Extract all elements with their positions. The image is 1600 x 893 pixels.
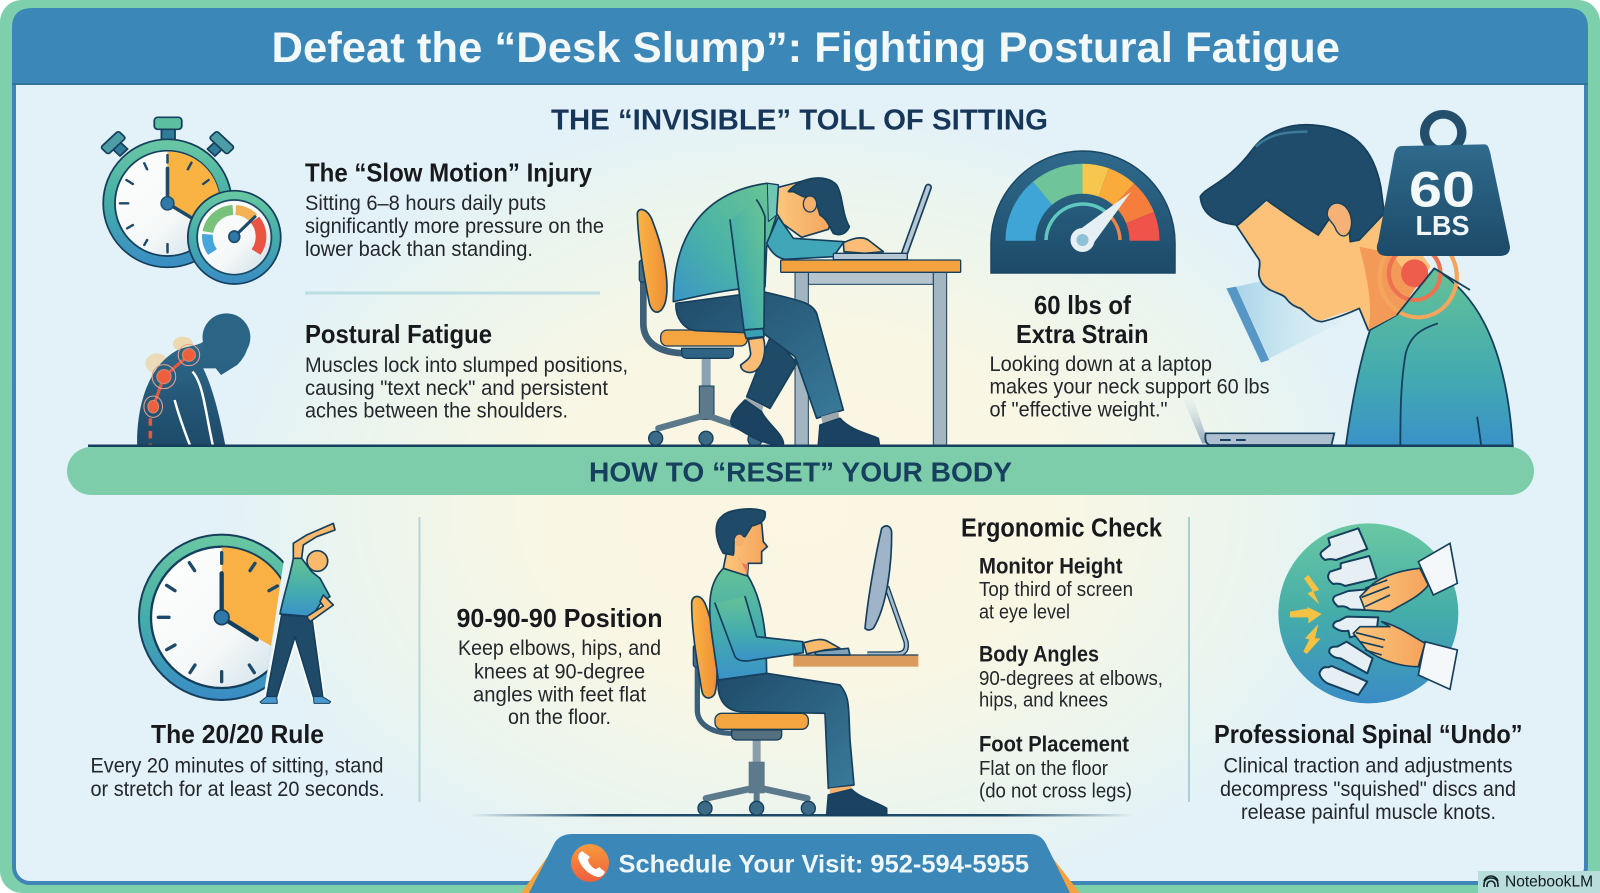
illustration: upright man at monitor	[692, 509, 918, 815]
icon: strain gauge	[991, 151, 1175, 273]
text: postural fatigue body: aches between the shoulders.	[305, 398, 568, 422]
text: 60 lbs body: makes your neck support 60 lbs	[990, 374, 1270, 398]
icon: phone	[571, 844, 609, 882]
block: ergonomic check	[961, 514, 1163, 802]
text: 60 lbs body: of "effective weight."	[990, 398, 1168, 422]
text: slow motion injury body	[305, 191, 604, 261]
upper hand	[1360, 543, 1457, 612]
laptop	[1181, 393, 1334, 445]
heading: slow motion injury: The “Slow Motion” Injury	[305, 158, 592, 188]
item: foot placement: Foot Placement	[979, 732, 1130, 756]
text: 90-90-90 body: Keep elbows, hips, and	[458, 636, 661, 660]
heading: reset: HOW TO “RESET” YOUR BODY	[589, 456, 1012, 488]
heading: professional spinal undo: Professional Spinal “Undo”	[1214, 719, 1522, 749]
chair	[692, 596, 815, 815]
title: Defeat the “Desk Slump”: Fighting Postural Fatigue	[272, 24, 1340, 72]
item: monitor height: Top third of screen	[979, 578, 1133, 601]
heading: 90-90-90 position: 90-90-90 Position	[456, 603, 662, 633]
text: postural fatigue body: Muscles lock into slumped positions,	[305, 353, 628, 377]
text: spinal undo body: Clinical traction and adjustments	[1224, 754, 1512, 778]
text: spinal undo body: release painful muscle knots.	[1241, 800, 1496, 824]
text: 20/20 rule body: Every 20 minutes of sitting, stand	[90, 754, 384, 778]
heading: 60 lbs of extra strain	[1016, 290, 1148, 349]
item: monitor height: Monitor Height	[979, 554, 1123, 578]
pain rings	[1380, 236, 1457, 317]
lower hand	[1353, 622, 1457, 689]
stretching person	[260, 523, 335, 703]
icon: slumped back with pain points	[137, 313, 250, 445]
band: how to reset your body	[67, 447, 1534, 495]
text: 60 lbs body	[990, 352, 1270, 422]
heading: postural fatigue: Postural Fatigue	[305, 319, 492, 349]
section: how to reset	[90, 509, 1522, 824]
NotebookLM badge	[1478, 871, 1600, 893]
text: spinal undo body	[1220, 754, 1516, 824]
item: monitor height	[979, 554, 1133, 624]
desk and monitor	[793, 526, 918, 667]
icon: 60 lbs weight: 60	[1409, 162, 1475, 218]
heading: 60 lbs of extra strain: Extra Strain	[1016, 319, 1148, 349]
text: 90-90-90 body: angles with feet flat	[473, 682, 646, 706]
title banner	[12, 8, 1588, 85]
chair	[637, 210, 762, 446]
text: 20/20 rule body: or stretch for at least 20 seconds.	[90, 777, 384, 801]
illustration: man looking down with 60 lb weight	[1181, 114, 1513, 447]
icon: spine adjustment	[1278, 523, 1458, 703]
impact arrow and bolts	[1290, 575, 1322, 654]
item: monitor height: at eye level	[979, 600, 1070, 624]
text: 90-90-90 body	[458, 636, 661, 729]
item: body angles: hips, and knees	[979, 688, 1108, 712]
desk	[795, 272, 947, 446]
icon: 60 lbs weight: LBS	[1416, 210, 1470, 241]
item: body angles	[979, 642, 1163, 712]
icon: stopwatch with mini gauge	[101, 117, 281, 284]
text: slow motion injury body: Sitting 6–8 hours daily puts	[305, 191, 546, 215]
heading: invisible toll: THE “INVISIBLE” TOLL OF SITTING	[551, 104, 1048, 136]
section: the invisible toll of sitting	[101, 104, 1513, 447]
heading: 20/20 rule: The 20/20 Rule	[151, 719, 324, 749]
item: body angles: 90-degrees at elbows,	[979, 667, 1163, 690]
item: foot placement: (do not cross legs)	[979, 780, 1132, 802]
text: postural fatigue body	[305, 353, 628, 422]
text: 60 lbs body: Looking down at a laptop	[990, 352, 1212, 376]
item: body angles: Body Angles	[979, 642, 1099, 666]
heading: ergonomic check: Ergonomic Check	[961, 514, 1163, 542]
vertebrae	[1319, 528, 1378, 695]
NotebookLM badge: NotebookLM	[1505, 874, 1593, 890]
text: slow motion injury body: lower back than standing.	[305, 237, 533, 261]
item: foot placement	[979, 732, 1132, 802]
illustration: slumped man at desk	[637, 178, 961, 446]
phone number text: Schedule Your Visit: 952-594-5955	[618, 850, 1029, 878]
text: postural fatigue body: causing "text neck" and persistent	[305, 376, 608, 400]
text: 90-90-90 body: on the floor.	[508, 705, 611, 729]
screen glow	[1226, 282, 1359, 363]
heading: 60 lbs of extra strain: 60 lbs of	[1034, 290, 1131, 320]
icon: 60 lbs weight	[1377, 114, 1510, 256]
text: 90-90-90 body: knees at 90-degree	[474, 660, 645, 684]
text: slow motion injury body: significantly more pressure on the	[305, 214, 604, 238]
item: foot placement: Flat on the floor	[979, 757, 1108, 780]
text: spinal undo body: decompress "squished" discs and	[1220, 777, 1516, 801]
icon: clock with stretching person	[139, 523, 335, 703]
text: 20/20 rule body	[90, 754, 384, 801]
call to action tab	[521, 834, 1080, 893]
